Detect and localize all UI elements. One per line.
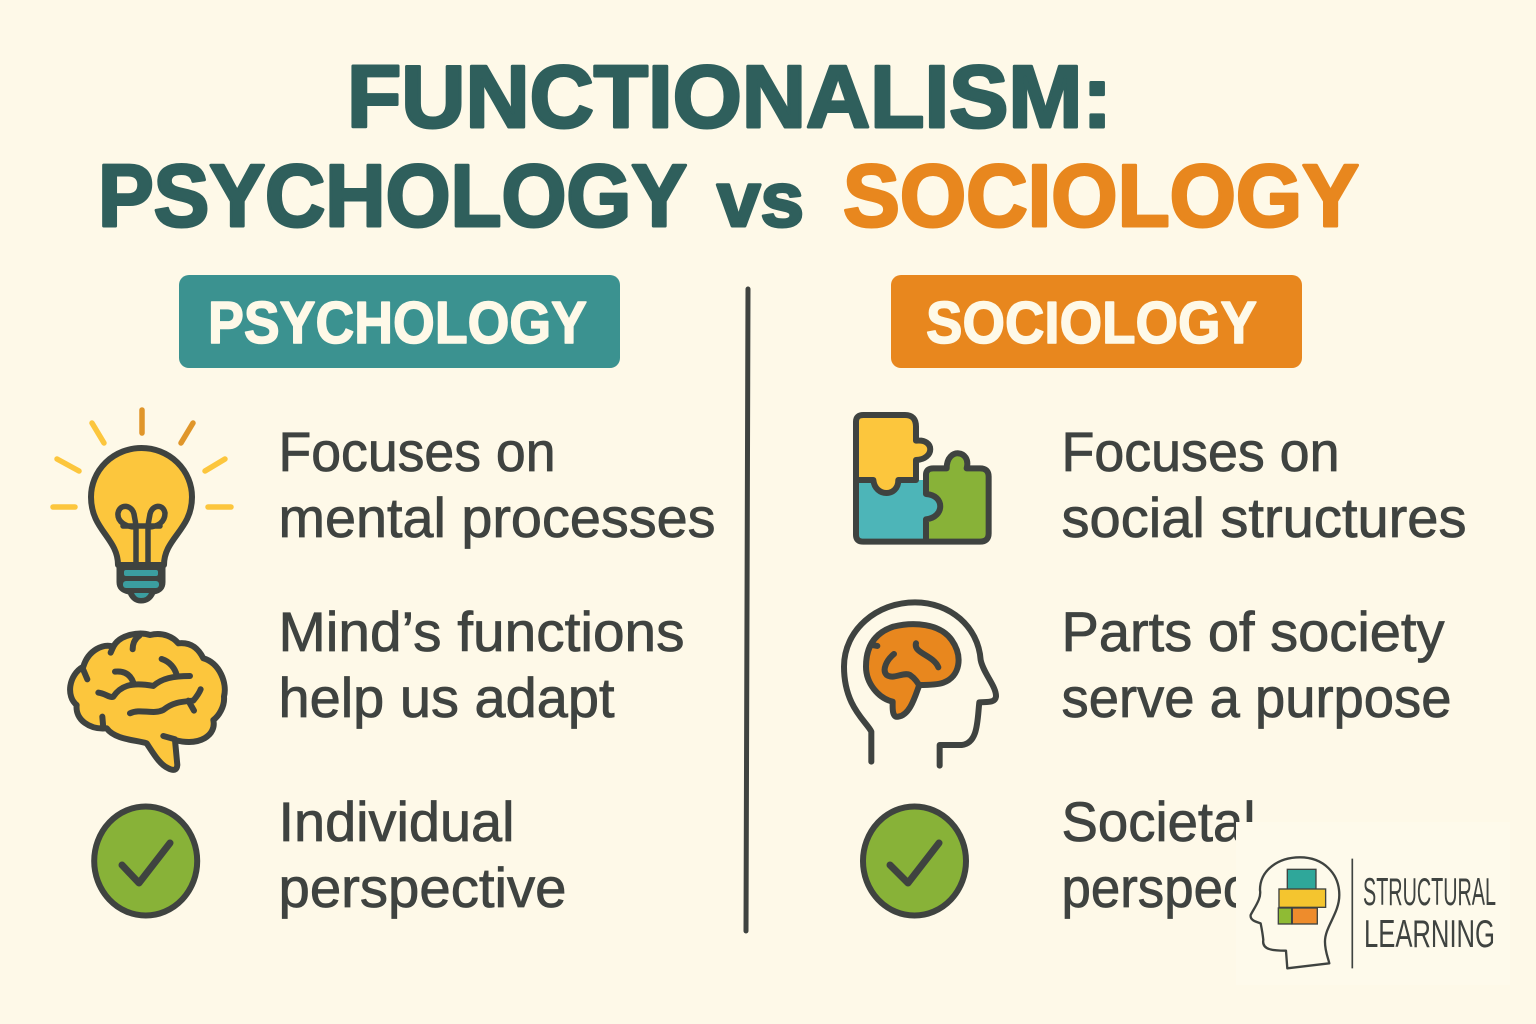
text: mind's functions help us adapt: Mind’s functions — [278, 600, 684, 663]
panel: sociology header — [891, 275, 1302, 368]
title — [98, 47, 1359, 245]
text: focuses on mental processes — [278, 420, 716, 549]
text: parts of society serve a purpose: Parts of society — [1062, 600, 1444, 663]
text: individual perspective: perspective — [278, 856, 566, 919]
icon: head with brain — [844, 602, 996, 766]
central divider — [746, 289, 748, 931]
panel: psychology header — [179, 275, 620, 368]
title: vs — [717, 155, 804, 243]
panel: psychology header: PSYCHOLOGY — [208, 290, 587, 356]
icon: check badge left — [94, 806, 197, 916]
text: parts of society serve a purpose — [1062, 600, 1452, 729]
text: focuses on mental processes: Focuses on — [278, 420, 556, 483]
text: societal perspective: Societal — [1062, 790, 1256, 853]
icon: light bulb — [53, 410, 231, 602]
text: focuses on social structures — [1062, 420, 1466, 549]
text: individual perspective: Individual — [278, 790, 514, 853]
title: SOCIOLOGY — [843, 146, 1359, 245]
text: focuses on mental processes: mental processes — [278, 486, 716, 549]
text: individual perspective — [278, 790, 566, 919]
title: FUNCTIONALISM: — [347, 47, 1112, 146]
text: societal perspective — [1062, 790, 1332, 919]
text: mind's functions help us adapt — [278, 600, 684, 729]
icon: brain — [70, 634, 225, 770]
logo: structural learning — [1236, 822, 1510, 985]
text: focuses on social structures: Focuses on — [1062, 420, 1340, 483]
icon: check badge right — [863, 806, 966, 916]
text: focuses on social structures: social structures — [1062, 486, 1466, 549]
icon: puzzle pieces — [856, 415, 989, 542]
text: parts of society serve a purpose: serve a purpose — [1062, 666, 1452, 729]
text: mind's functions help us adapt: help us adapt — [278, 666, 615, 729]
panel: sociology header: SOCIOLOGY — [926, 290, 1257, 356]
title: PSYCHOLOGY — [98, 146, 687, 245]
text: societal perspective: perspective — [1062, 856, 1332, 919]
